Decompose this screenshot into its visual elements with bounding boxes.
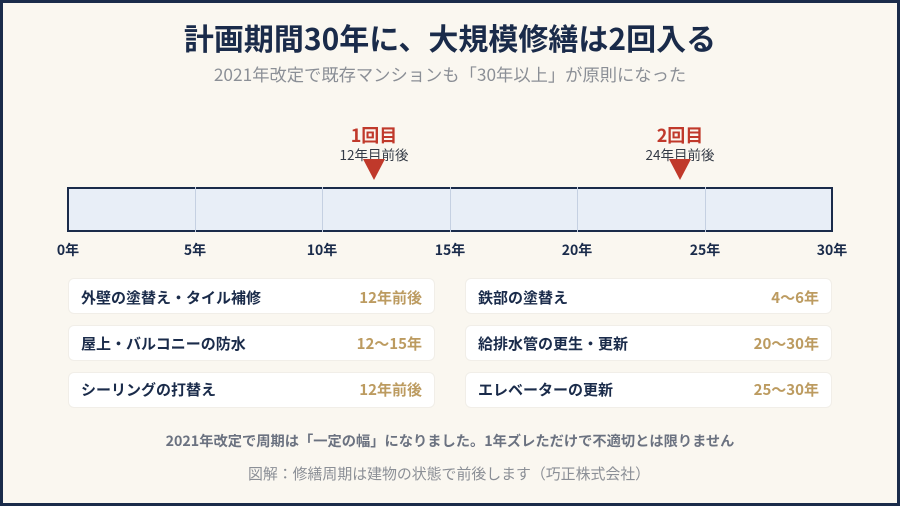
card: elevator: 25〜30年 <box>754 378 819 400</box>
timeline bar <box>67 187 833 232</box>
card: water pipes: 給排水管の更生・更新 <box>478 332 628 354</box>
subtitle: 2021年改定で既存マンションも「30年以上」が原則になった <box>214 61 686 86</box>
timeline axis labels: 15年 <box>435 240 465 260</box>
icon: first marker arrow <box>363 159 385 180</box>
card: sealing: 12年前後 <box>359 378 422 400</box>
timeline axis labels: 5年 <box>184 240 206 260</box>
note: 2021年改定で周期は「一定の幅」になりました。1年ズレただけで不適切とは限りません <box>166 430 734 451</box>
timeline axis labels: 30年 <box>817 240 847 260</box>
timeline axis labels: 0年 <box>57 240 79 260</box>
card: exterior wall <box>68 278 435 314</box>
marker heading: first: 1回目 <box>351 122 397 148</box>
marker: first repair <box>340 122 408 180</box>
card: ironwork <box>465 278 832 314</box>
marker heading: second: 2回目 <box>657 122 703 148</box>
timeline axis labels <box>57 240 847 260</box>
card: elevator <box>465 372 832 408</box>
title: 計画期間30年に、大規模修繕は2回入る <box>184 15 716 59</box>
card: water pipes <box>465 325 832 361</box>
card: roof waterproofing <box>68 325 435 361</box>
card: roof waterproofing: 屋上・バルコニーの防水 <box>81 332 246 354</box>
marker note: second: 24年目前後 <box>646 144 714 164</box>
timeline axis labels: 20年 <box>562 240 592 260</box>
timeline axis labels: 10年 <box>307 240 337 260</box>
card: elevator: エレベーターの更新 <box>478 378 613 400</box>
timeline axis labels: 25年 <box>690 240 720 260</box>
marker note: first: 12年目前後 <box>340 144 408 164</box>
card: roof waterproofing: 12〜15年 <box>357 332 422 354</box>
card: ironwork: 4〜6年 <box>771 286 819 308</box>
caption: 図解：修繕周期は建物の状態で前後します（巧正株式会社） <box>248 463 650 484</box>
card: sealing: シーリングの打替え <box>81 378 216 400</box>
card: exterior wall: 12年前後 <box>359 286 422 308</box>
card: ironwork: 鉄部の塗替え <box>478 286 568 308</box>
card: sealing <box>68 372 435 408</box>
icon: second marker arrow <box>669 159 691 180</box>
card: water pipes: 20〜30年 <box>754 332 819 354</box>
card: exterior wall: 外壁の塗替え・タイル補修 <box>81 286 261 308</box>
marker: second repair <box>646 122 714 180</box>
